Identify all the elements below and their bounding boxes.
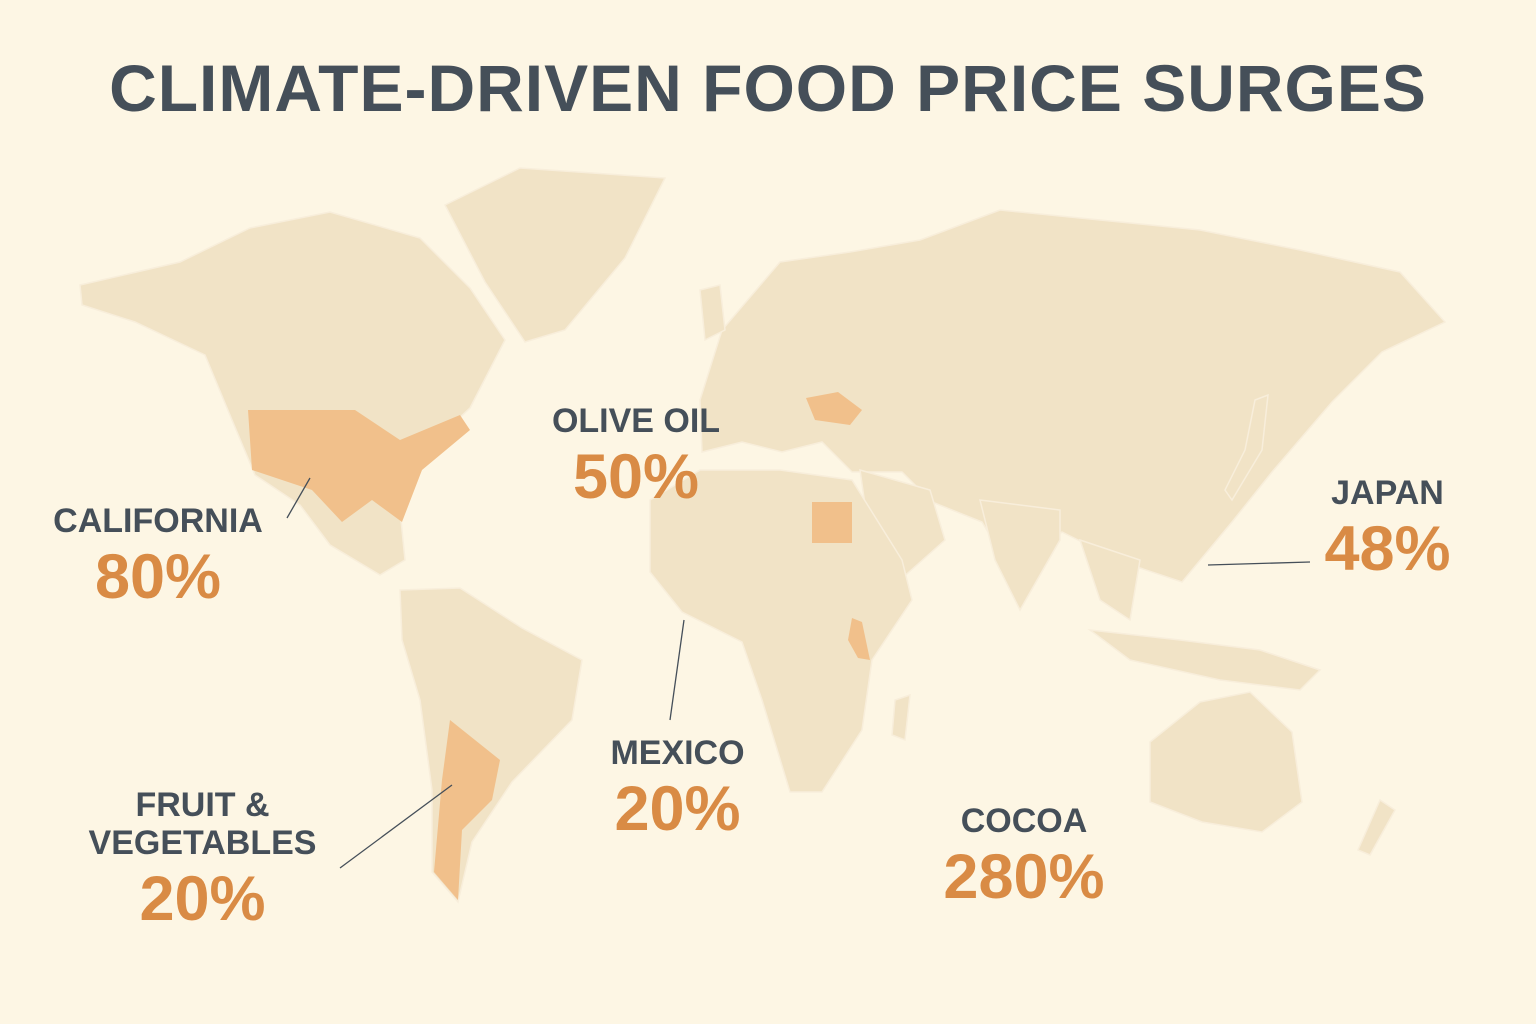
eurasia <box>700 210 1445 582</box>
highlighted regions <box>248 392 870 900</box>
africa <box>650 470 912 792</box>
japan <box>1225 395 1268 500</box>
callout: fruit & vegetables <box>88 786 316 934</box>
callout: mexico <box>610 734 745 844</box>
indonesia <box>1090 630 1320 690</box>
callout: japan <box>1324 474 1451 584</box>
callout: fruit & vegetables: VEGETABLES <box>89 824 316 862</box>
callout: olive oil: OLIVE OIL <box>552 402 720 440</box>
callout: cocoa: COCOA <box>961 802 1087 840</box>
leader lines <box>287 478 1310 868</box>
callout: california: 80% <box>95 542 221 612</box>
callout: cocoa <box>943 802 1105 912</box>
callout: cocoa: 280% <box>943 842 1105 912</box>
greenland <box>445 168 665 342</box>
callout: fruit & vegetables: FRUIT & <box>135 786 270 824</box>
india <box>980 500 1060 610</box>
callout: olive oil <box>552 402 720 512</box>
callout: california: CALIFORNIA <box>53 502 263 540</box>
arabia <box>860 470 945 580</box>
callout: fruit & vegetables: 20% <box>139 864 266 934</box>
callout: mexico: 20% <box>614 774 741 844</box>
southeast asia <box>1080 540 1140 620</box>
australia <box>1150 692 1302 832</box>
title: CLIMATE-DRIVEN FOOD PRICE SURGES <box>109 51 1427 125</box>
new zealand <box>1358 800 1395 855</box>
callout: japan: 48% <box>1324 514 1451 584</box>
callout: california <box>53 502 263 612</box>
uk <box>700 285 725 340</box>
callout: mexico: MEXICO <box>610 734 745 772</box>
callout: olive oil: 50% <box>573 442 699 512</box>
madagascar <box>892 695 910 740</box>
callout: japan: JAPAN <box>1331 474 1444 512</box>
south america <box>400 588 582 902</box>
north america <box>80 212 505 575</box>
